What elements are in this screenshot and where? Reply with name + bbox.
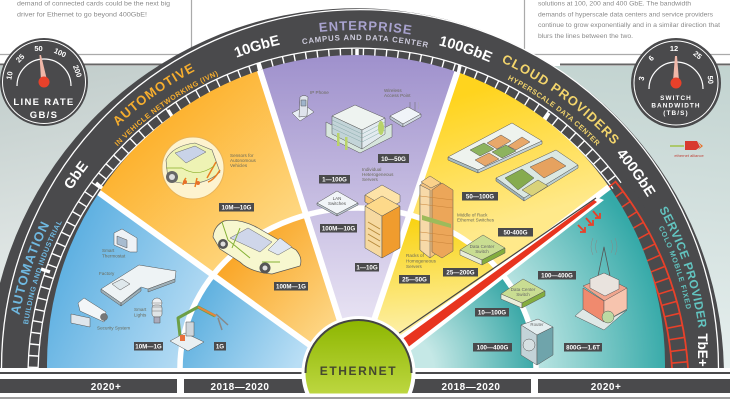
timeline bar: 2020+ left: 2020+ [91, 382, 121, 393]
text: racks of homogeneous servers: Servers [406, 264, 423, 269]
sector: automation [47, 194, 209, 368]
icon: ethernet alliance logo: ethernet alliance [674, 153, 704, 158]
icon: smart thermostat [114, 229, 137, 252]
icon: LAN switches [317, 191, 358, 216]
text: factory: Factory [99, 271, 115, 276]
ethernet hub [302, 316, 416, 394]
sector: automotive [98, 70, 302, 272]
icon: data center switch, service provider [501, 279, 545, 308]
dial: switch bandwidth: 12 [670, 44, 678, 53]
icon: data center switch, cloud: Switch [475, 249, 489, 254]
label: 50-400G [498, 228, 533, 236]
top text: automotive note: demand of connected cards could be the next big [17, 0, 170, 8]
text: middle of rack ethernet switches: Ethernet Switches [457, 218, 495, 222]
label: 800G-1.6T: 800G—1.6T [566, 344, 600, 352]
speed labels on arc: 400GbE [618, 150, 656, 197]
icon: router: Router [530, 322, 544, 327]
text: racks of homogeneous servers: Racks of [406, 253, 424, 258]
segment names on arc: BUILDING AND INDUSTRIAL [23, 222, 62, 324]
label: 10-50G [378, 154, 409, 163]
text: individual heterogeneous servers: Servers [362, 177, 379, 182]
icon: data center switch, service provider: Data Center [511, 287, 536, 292]
icon: factory [101, 265, 176, 306]
label: 100-400G upper [538, 271, 576, 280]
top text: cloud note: blurs the lines between the two. [538, 33, 633, 40]
label: 100-400G lower [473, 343, 512, 352]
icon: IP phone [292, 96, 314, 121]
red 400GbE beam [398, 197, 604, 352]
label: 100M-1G: 100M—1G [276, 284, 306, 290]
label: 25-200G [443, 268, 478, 276]
timeline rule [0, 372, 730, 374]
dial: line rate: 50 [34, 44, 43, 53]
label: 10-50G: 10—50G [381, 156, 406, 163]
segment names on arc: AUTOMATION [11, 221, 49, 315]
red ladder to terabit [603, 181, 688, 368]
timeline bar: 2018-2020 left [184, 379, 314, 393]
text: smart lights: Lights [134, 312, 147, 318]
speed labels on arc: GbE [65, 160, 88, 188]
label: 1G [214, 342, 226, 350]
sector: cloud providers [378, 72, 609, 318]
text: individual heterogeneous servers: Individual [362, 167, 381, 172]
label: 25-200G: 25—200G [446, 270, 475, 276]
speed labels [134, 154, 602, 352]
text: security system: Security System [97, 326, 130, 330]
dial: line rate: 200 [71, 64, 84, 79]
icon: hyperscale data center A [448, 123, 542, 173]
ethernet hub: ETHERNET [320, 364, 397, 378]
segment names on arc: CAMPUS AND DATA CENTER [302, 34, 428, 48]
dial: switch bandwidth: (TB/S) [663, 110, 689, 117]
text: wireless access point: Access Point [384, 93, 411, 98]
icon: hyperscale data center B [496, 150, 578, 201]
icon: data center switch, service provider: Switch [516, 292, 530, 297]
timeline bar: 2018-2020 right: 2018—2020 [442, 382, 500, 393]
dial: line rate: GB/S [30, 110, 58, 121]
text: racks of homogeneous servers: Homogeneous [406, 258, 437, 264]
label: 10M-10G: 10M—10G [222, 204, 252, 212]
top text: cloud note: demands of hyperscale data centers and service providers [538, 12, 713, 18]
label: 100M-10G: 100M—10G [322, 226, 355, 232]
dial: line rate: 10 [4, 71, 15, 80]
dial: line rate [0, 38, 88, 126]
dial: switch bandwidth [631, 38, 721, 128]
label: 10M-1G: 10M—1G [135, 344, 162, 350]
icon: wireless access point [390, 102, 421, 127]
icon: campus building [326, 105, 392, 153]
sector: enterprise [261, 55, 458, 318]
label: 100-400G lower: 100—400G [477, 344, 509, 352]
text: sensors for autonomous vehicles: Autonomous [230, 158, 256, 163]
text: wireless access point: Wireless [384, 88, 402, 93]
label: 10-100G [475, 308, 509, 316]
icon: data center switch, cloud [460, 235, 505, 265]
timeline bar: 2018-2020 right [400, 379, 531, 393]
segment names on arc: HYPERSCALE DATA CENTER [508, 75, 600, 146]
dial: line rate: 25 [14, 52, 26, 64]
inner sector: cloud providers [378, 218, 494, 335]
icon: cell tower and building [575, 238, 627, 330]
label: 50-100G: 50—100G [466, 194, 494, 200]
sectors [47, 55, 665, 368]
label: 10-100G: 10—100G [478, 310, 506, 316]
dial: switch bandwidth: 3 [637, 76, 646, 81]
icon: smart light bulb [152, 298, 162, 323]
text: smart lights: Smart [134, 307, 146, 312]
label: 1-100G [319, 175, 350, 184]
top text: automotive note: driver for Ethernet to go beyond 400GbE! [17, 12, 147, 18]
label: 50-400G: 50-400G [503, 230, 528, 236]
dial: switch bandwidth: SWITCH [660, 95, 692, 102]
label: 50-100G [462, 192, 498, 200]
segment names on arc: AUTOMOTIVE [114, 63, 195, 126]
dial: switch bandwidth: 50 [706, 75, 715, 84]
dial: line rate: 100 [52, 46, 68, 59]
timeline bar: 2018-2020 left: 2018—2020 [210, 382, 270, 393]
icon: connected car [213, 220, 301, 274]
segment names on arc: CLOUD PROVIDERS [503, 55, 619, 144]
timeline bar: 2020+ right: 2020+ [591, 382, 621, 393]
text: smart thermostat: Smart [102, 248, 114, 253]
speed labels on arc: TbE+ [695, 333, 710, 367]
top text: cloud note: solutions at 100, 200 and 400 GbE. The bandwidth [538, 0, 691, 8]
dial: line rate: LINE RATE [13, 97, 75, 108]
icon: data center switch, cloud: Data Center [470, 244, 495, 249]
inner sector: automotive [217, 218, 336, 342]
label: 1G: 1G [216, 344, 224, 350]
icon: racks of homogeneous servers [420, 176, 453, 258]
inner sector: service provider [411, 279, 534, 368]
label: 25-50G: 25—50G [402, 276, 427, 284]
sector: service provider [506, 187, 665, 368]
speed labels on arc [65, 35, 710, 382]
text: IP phone: IP Phone [310, 90, 329, 95]
icon: sensors on autonomous vehicle [162, 137, 224, 199]
label: 25-50G [399, 275, 430, 284]
timeline bar: 2020+ left [0, 379, 177, 393]
text: sensors for autonomous vehicles: Vehicles [230, 163, 248, 168]
top text: automotive note [17, 0, 170, 18]
label: 1-10G: 1—10G [356, 264, 378, 272]
dial: switch bandwidth: BANDWIDTH [651, 102, 701, 110]
label: 100-400G upper: 100—400G [541, 272, 573, 280]
segment names on arc: ENTERPRISE [319, 21, 412, 34]
icon: security camera [71, 298, 108, 327]
icon: red arrows [578, 211, 600, 232]
text: middle of rack ethernet switches: Middle of Rack [457, 212, 487, 218]
icon: heterogeneous server stack [365, 185, 400, 258]
icon: LAN switches: Switches [328, 201, 347, 206]
text: sensors for autonomous vehicles: Sensors for [230, 153, 254, 158]
inner sector: automation [182, 279, 294, 368]
timeline bar: 2020+ right [538, 379, 730, 393]
top text: cloud note: continue to grow exponentially and in a similar direction that [538, 22, 720, 29]
segment names on arc: IN VEHICLE NETWORKING (IVN) [114, 70, 218, 146]
label: 1-100G: 1—100G [322, 176, 347, 184]
text: smart thermostat: Thermostat [102, 254, 126, 258]
speed labels on arc: 10GbE [234, 35, 280, 58]
icon: ethernet alliance logo [670, 141, 704, 158]
text: individual heterogeneous servers: Heterogeneous [362, 172, 394, 177]
segment names on arc [11, 21, 706, 328]
dial: switch bandwidth: 6 [647, 54, 656, 63]
segment names on arc: COLO MOBILE FIXED [659, 226, 691, 309]
icon: router [521, 319, 553, 365]
icon: robot arm [170, 307, 228, 351]
dial: switch bandwidth: 25 [692, 49, 704, 61]
icon: LAN switches: LAN [333, 196, 341, 201]
segment names on arc: SERVICE PROVIDER [660, 206, 706, 328]
top text: cloud note [538, 0, 720, 40]
speed labels on arc: 100GbE [439, 36, 493, 62]
